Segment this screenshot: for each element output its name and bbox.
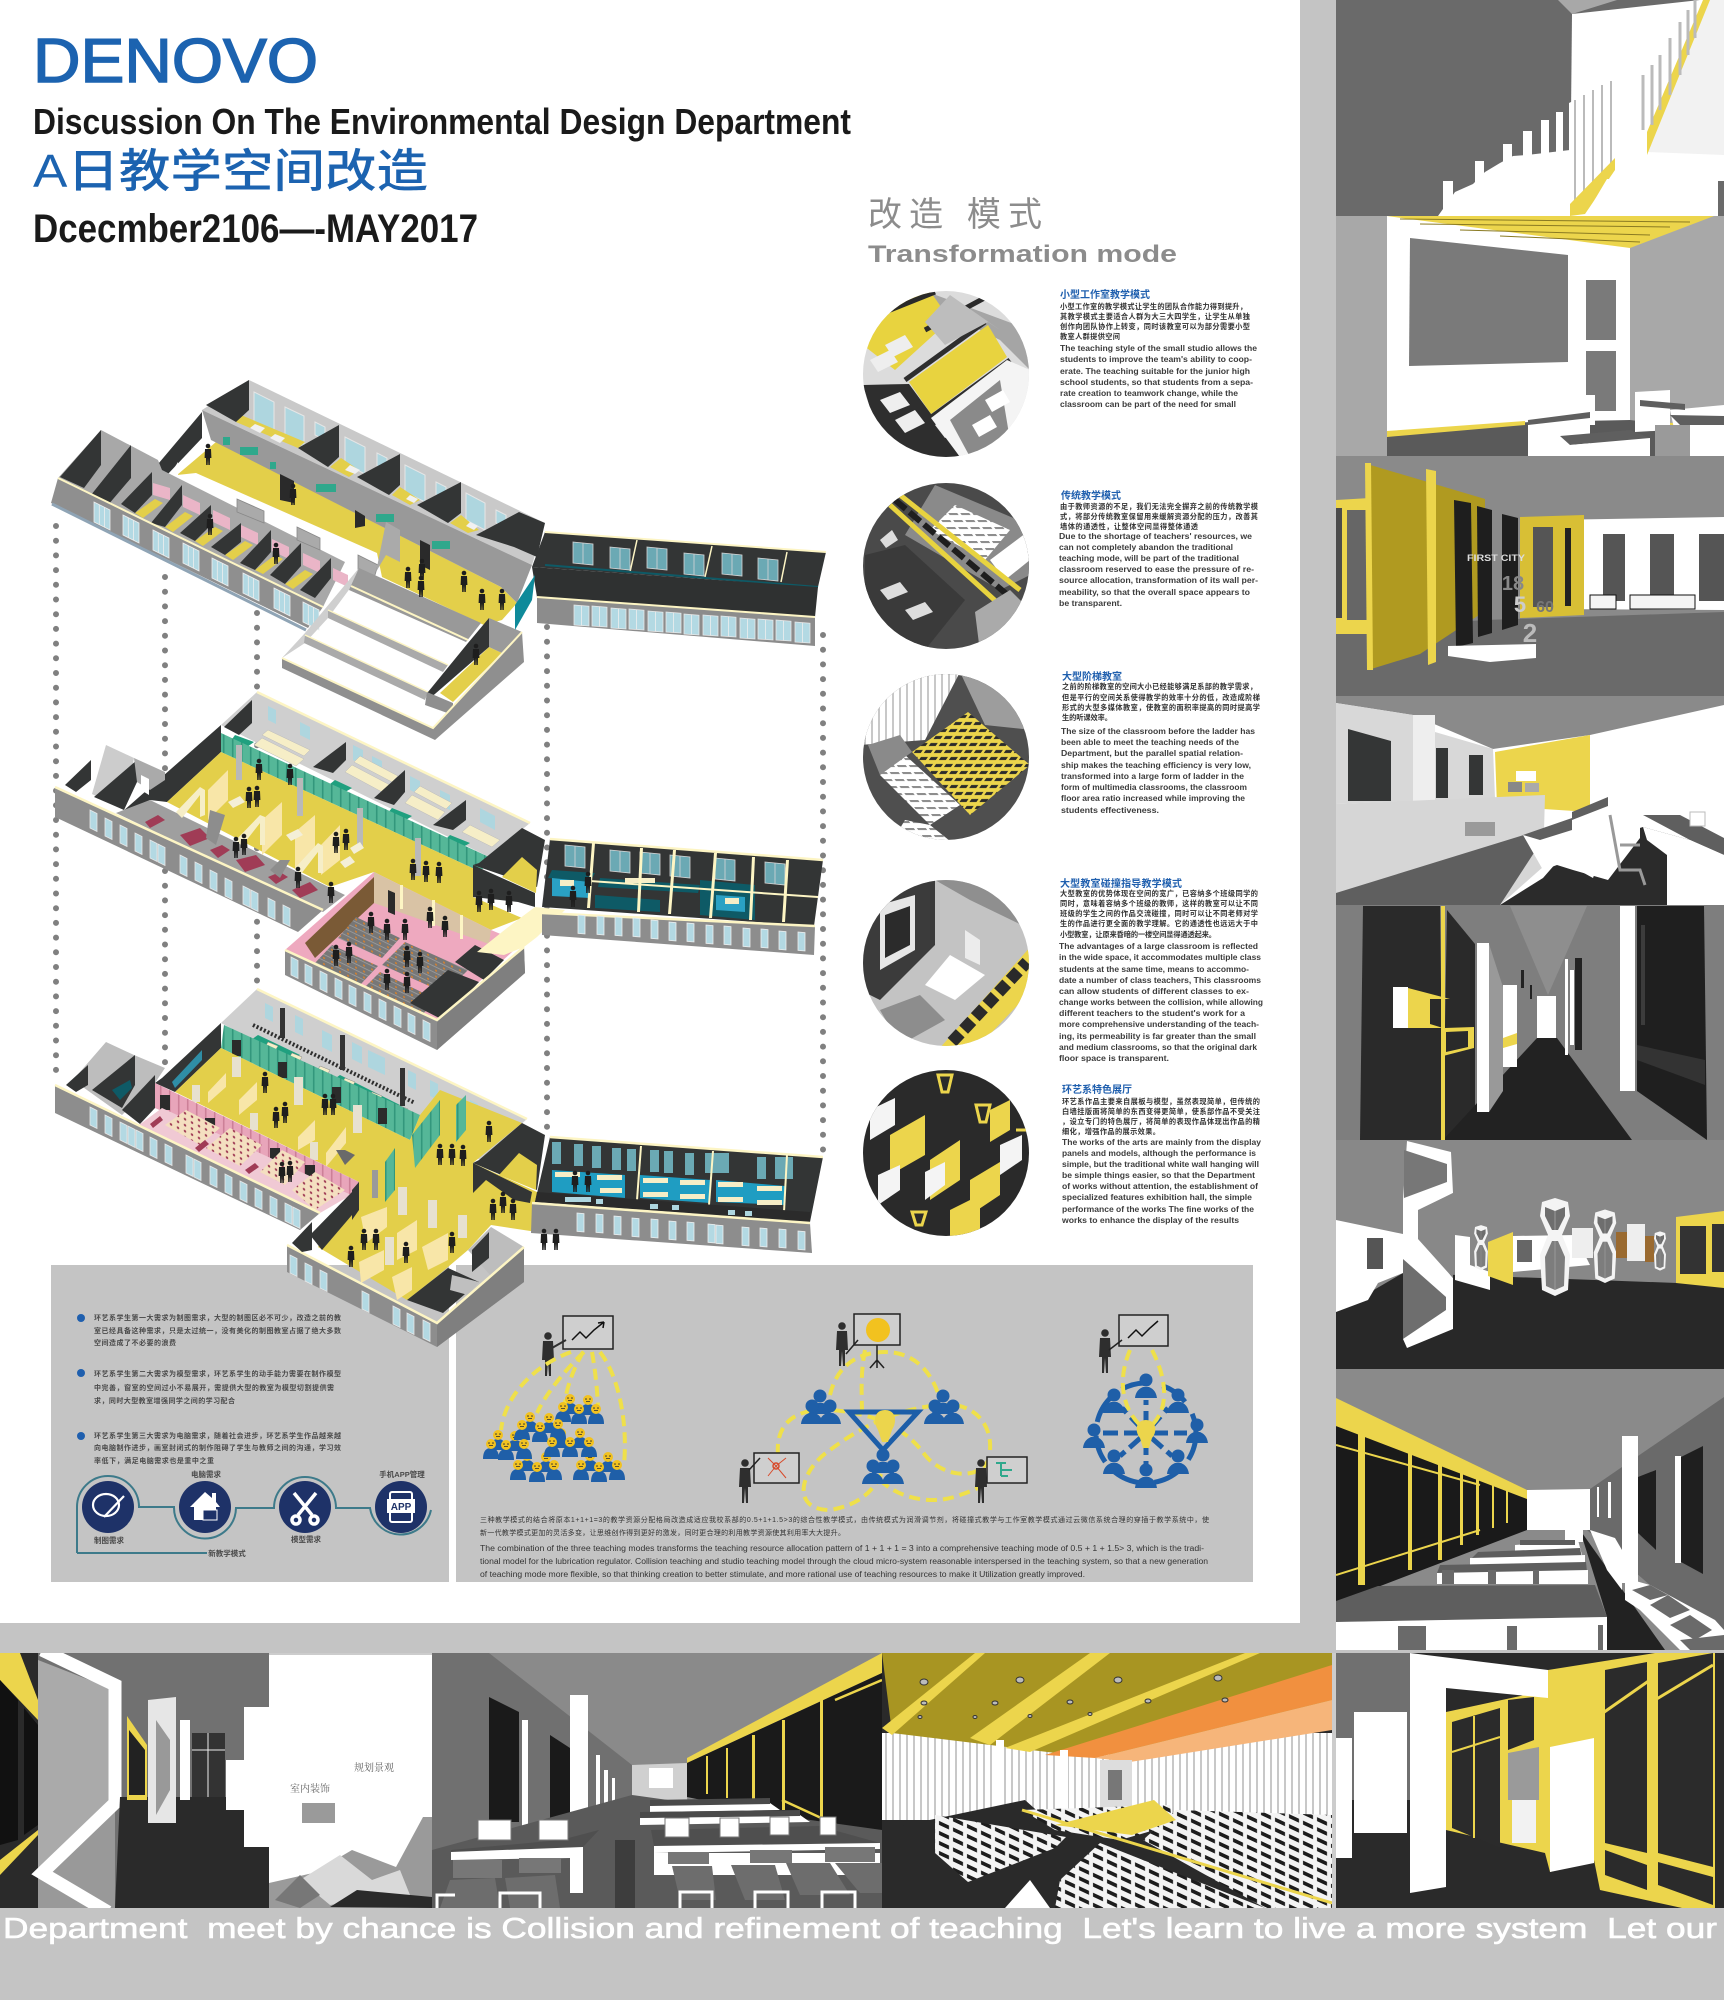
text block: traditional classroom: can not completely abandon the traditional [1059,543,1233,552]
photo circle: traditional classroom [860,480,1032,652]
text block: small studio: 小型工作室教学模式 [1060,288,1150,301]
text block: traditional classroom: source allocation, transformation of its wall per- [1059,576,1258,585]
text block: collision classroom: more comprehensive understanding of the teach- [1059,1020,1259,1029]
flow diagram: needs icons: 新教学模式 [208,1548,246,1558]
render: mural wall: 规划景观 [354,1761,394,1774]
render: hexagon exhibition [1336,1140,1724,1369]
text block: exhibition hall: The works of the arts are mainly from the display [1062,1138,1262,1147]
render: exterior atrium with sculpture: 60 [1536,599,1554,616]
text block: lecture room [1061,670,1260,815]
text block: collision classroom: ing, its permeability is far greater than the small [1059,1032,1256,1041]
text block: collision classroom: students at the same time, means to accommo- [1059,965,1249,974]
render: hex corridor strip [0,1653,269,1908]
text block: small studio [1060,288,1258,409]
needs list with bullets: 求，同时大型教室增强同学之间的学习配合 [94,1396,235,1405]
chinese title: A日教学空间改造 [33,145,428,197]
needs list with bullets: 环艺系学生第三大需求为电脑需求，随着社会进步，环艺系学生作品越来越 [94,1431,341,1440]
text block: exhibition hall: 细化，增强作品的展示效果。 [1062,1127,1160,1136]
text block: collision classroom: The advantages of a large classroom is reflected [1059,942,1258,951]
needs list with bullets [77,1313,341,1465]
heading: transformation mode [868,196,1177,268]
text block: collision classroom: 生的作品进行更全面的教学理解。它的通透性也远远大于中 [1060,919,1258,928]
flow diagram: needs icons: APP [391,1502,412,1513]
render: exterior atrium with sculpture: 2 [1523,618,1537,648]
text block: traditional classroom: be transparent. [1059,599,1122,608]
text block: exhibition hall: be simple things easier, so that the Department [1062,1171,1255,1180]
flow diagram: needs icons: 电脑需求 [191,1469,221,1479]
needs list with bullets: 空间造成了不必要的浪费 [94,1338,176,1347]
paragraph: teaching mode combination: The combination of the three teaching modes transforms the teaching resource allocation pattern of 1 + 1 + 1 = 3 into a comprehensive teaching mode of 0.5 + 1 + 1.5> 3, which is the tradi- [480,1544,1204,1553]
paragraph: teaching mode combination [480,1515,1209,1579]
text block: lecture room: been able to meet the teaching needs of the [1061,738,1240,747]
text block: lecture room: 形式的大型多媒体教室，使教室的面积率提高的同时提高学 [1062,703,1260,712]
text block: collision classroom: in the wide space, it accommodates multiple class [1059,953,1262,962]
render: computer lab [432,1653,882,1908]
floor plan: bottom level [55,989,823,1347]
needs list with bullets: 室已经具备这种需求，只是太过统一，没有美化的制图教室占据了绝大多数 [94,1326,341,1335]
text block: small studio: 其教学模式主要适合人群为大三大四学生，让学生从单独 [1060,312,1251,321]
text block: lecture room: 大型阶梯教室 [1062,670,1122,683]
text block: exhibition hall: 环艺系特色展厅 [1062,1083,1132,1096]
text block: lecture room: form of multimedia classrooms, the classroom [1061,783,1247,792]
text block: collision classroom: and medium classrooms, so that the original dark [1059,1043,1258,1052]
flow diagram: needs icons: 手机APP管理 [379,1469,425,1479]
dotted connector lines [56,526,823,1160]
paragraph: teaching mode combination: 新一代教学模式更加的灵活多变，让思维创作得到更好的激发，同时更合理的利用教学资源使其利用率大大提升。 [480,1528,845,1537]
text block: traditional classroom: Due to the shortage of teachers' resources, we [1059,532,1253,541]
text block: exhibition hall: simple, but the traditional white wall hanging will [1062,1160,1259,1169]
floor plan: middle level [55,692,823,1050]
text block: exhibition hall: of works without attention, the establishment of [1062,1182,1258,1191]
needs list with bullets: 向电脑制作进步，画室封闭式的制作阻碍了学生与教师之间的沟通，学习效 [94,1443,341,1452]
render: mural wall [269,1655,432,1908]
render: exterior atrium with sculpture: 18 [1502,573,1524,595]
text block: collision classroom [1059,877,1263,1063]
photo circle: small studio [860,288,1032,460]
text block: lecture room: The size of the classroom before the ladder has [1061,727,1256,736]
text block: exhibition hall: specialized features exhibition hall, the simple [1062,1193,1253,1202]
photo circle: exhibition hall [860,1068,1032,1240]
text block: collision classroom: date a number of class teachers, This classrooms [1059,976,1262,985]
paragraph: teaching mode combination: of teaching mode more flexible, so that thinking creation to better stimulate, and more rational use of teaching resources to make it Utilization greatly improved. [480,1570,1085,1579]
text block: traditional classroom: 由于教师资源的不足，我们无法完全摒弃之前的传统教学模 [1060,502,1259,511]
render: studio with screen [1336,216,1724,456]
text block: collision classroom: different teachers to the student's work for a [1059,1009,1246,1018]
render: mural wall: 室内装饰 [290,1782,330,1795]
text block: traditional classroom: meability, so that the overall space appears to [1059,588,1250,597]
text block: collision classroom: floor space is transparent. [1059,1054,1169,1063]
flow diagram: needs icons: 模型需求 [291,1534,321,1544]
text block: collision classroom: 同时，意味着容纳多个班级的教师，这样的教室可以让不同 [1060,899,1258,908]
render: lecture hall ceiling [882,1653,1332,1908]
text block: lecture room: 生的听课效率。 [1062,713,1112,722]
render: exterior atrium with sculpture: FIRST CITY [1467,553,1525,563]
heading: transformation mode: 改造 模式 [868,196,1043,234]
text block: lecture room: floor area ratio increased while improving the [1061,794,1246,803]
text block: small studio: rate creation to teamwork change, while the [1060,389,1239,398]
slogan band text: Department meet by chance is Collision and refinement of teaching Let's learn to live a more system Let our [3,1913,1717,1945]
text block: small studio: 创作向团队协作上转变，同时该教室可以为部分需要小型 [1060,322,1250,331]
text block: exhibition hall: works to enhance the display of the results [1061,1216,1240,1225]
diagram: lecture mode [483,1316,625,1482]
render: exterior atrium with sculpture [1336,456,1724,696]
main white sheet [0,0,1300,1623]
text block: small studio: classroom can be part of the need for small [1060,400,1236,409]
render: desks with yellow wall [1336,696,1724,905]
subtitle: Discussion On The Environmental Design Department [33,101,851,142]
floor plan: top level [51,380,826,740]
text block: exhibition hall: 环艺系作品主要来自展板与模型，虽然表现简单，但传统的 [1062,1097,1260,1106]
needs list with bullets: 中完善，窗室的空间过小不易展开，需提供大型的教室为模型切割提供需 [94,1383,334,1392]
date: Dcecmber2106—-MAY2017 [33,207,478,251]
render: corridor [1336,905,1724,1140]
flow diagram: needs icons [77,1469,431,1558]
needs list with bullets: 环艺系学生第二大需求为模型需求，环艺系学生的动手能力需要在制作模型 [94,1369,341,1378]
flow diagram: needs icons: 制图需求 [94,1535,124,1545]
text block: traditional classroom: 墙体的通透性，让整体空间显得整体通透 [1060,522,1199,531]
text block: traditional classroom: classroom reserved to ease the pressure of re- [1059,565,1254,574]
text block: traditional classroom [1059,489,1259,608]
paragraph: teaching mode combination: 三种教学模式的结合将原本1+1+1=3的教学资源分配格局改造成适应我校系部的0.5+1+1.5>3的综合性教学模式，由传统模式为润滑调节剂，将碰撞式教学与工作室教学模式通过云微信系统合理的穿插于教学系统中，使 [480,1515,1209,1524]
text block: exhibition hall: 白墙挂版面将简单的东西变得更简单，使系部作品不受关注 [1062,1107,1260,1116]
text block: traditional classroom: 传统教学模式 [1061,489,1121,502]
text block: small studio: school students, so that students from a sepa- [1060,378,1253,387]
title: DENOVO: DENOVO [33,27,318,96]
text block: small studio: 教室人群提供空间 [1060,332,1120,341]
text block: exhibition hall: panels and models, although the performance is [1062,1149,1257,1158]
text block: exhibition hall: ，设立专门的特色展厅，将简单的表现作品体现出作品的精 [1062,1117,1260,1126]
text block: small studio: The teaching style of the small studio allows the [1060,344,1258,353]
text block: traditional classroom: teaching mode, will be part of the traditional [1059,554,1239,563]
render: stair hall [1336,0,1724,216]
text block: small studio: erate. The teaching suitable for the junior high [1060,367,1250,376]
text block: collision classroom: can allow students of different classes to ex- [1059,987,1249,996]
diagram: network mode [1083,1315,1208,1488]
needs list with bullets: 率低下，满足电脑需求也是重中之重 [94,1456,214,1465]
panel: lower left needs [51,1265,449,1582]
render: exterior atrium with sculpture: 5 [1514,592,1526,617]
text block: lecture room: 但是平行的空间关系使得教学的效率十分的低，改造成阶梯 [1062,693,1260,702]
text block: collision classroom: 大型教室的优势体现在空间的宽广，已容纳多个班级同学的 [1060,889,1258,898]
text block: small studio: 小型工作室的教学模式让学生的团队合作能力得到提升， [1060,302,1247,311]
heading: transformation mode: Transformation mode [868,241,1177,268]
photo circle: collision classroom [860,878,1032,1050]
text block: lecture room: transformed into a large form of ladder in the [1061,772,1245,781]
photo circle: lecture room [860,672,1032,845]
text block: traditional classroom: 式，将部分传统教室保留用来缓解资源分配的压力，改善其 [1060,512,1258,521]
text block: lecture room: 之前的阶梯教室的空间大小已经能够满足系部的教学需求， [1062,682,1257,691]
text block: collision classroom: 班级的学生之间的作品交流碰撞，同时可以让不同老师对学 [1060,909,1258,918]
text block: collision classroom: 小型教室，让原来昏暗的一楼空间显得通透起来。 [1060,930,1216,939]
text block: small studio: students to improve the team's ability to coop- [1060,355,1252,364]
text block: collision classroom: change works between the collision, while allowing [1059,998,1263,1007]
text block: collision classroom: 大型教室碰撞指导教学模式 [1060,877,1182,890]
needs list with bullets: 环艺系学生第一大需求为制图需求，大型的制图区必不可少，改造之前的教 [94,1313,341,1322]
text block: exhibition hall [1061,1083,1262,1225]
paragraph: teaching mode combination: tional model for the lubrication regulator. Collision teaching and studio teaching model through the cloud micro-system reasonable interspersed in the teaching system, so that a new generation [480,1557,1208,1566]
render: computer lab wide [1336,1369,1724,1650]
text block: lecture room: students effectiveness. [1061,806,1159,815]
render: corridor with frames [1336,1653,1724,1908]
text block: lecture room: ship makes the teaching efficiency is very low, [1061,761,1251,770]
diagram: collision mode [739,1314,1027,1510]
text block: exhibition hall: performance of the works The fine works of the [1062,1205,1255,1214]
text block: lecture room: Department, but the parallel spatial relation- [1061,749,1243,758]
panel: lower right teaching modes [456,1265,1253,1582]
